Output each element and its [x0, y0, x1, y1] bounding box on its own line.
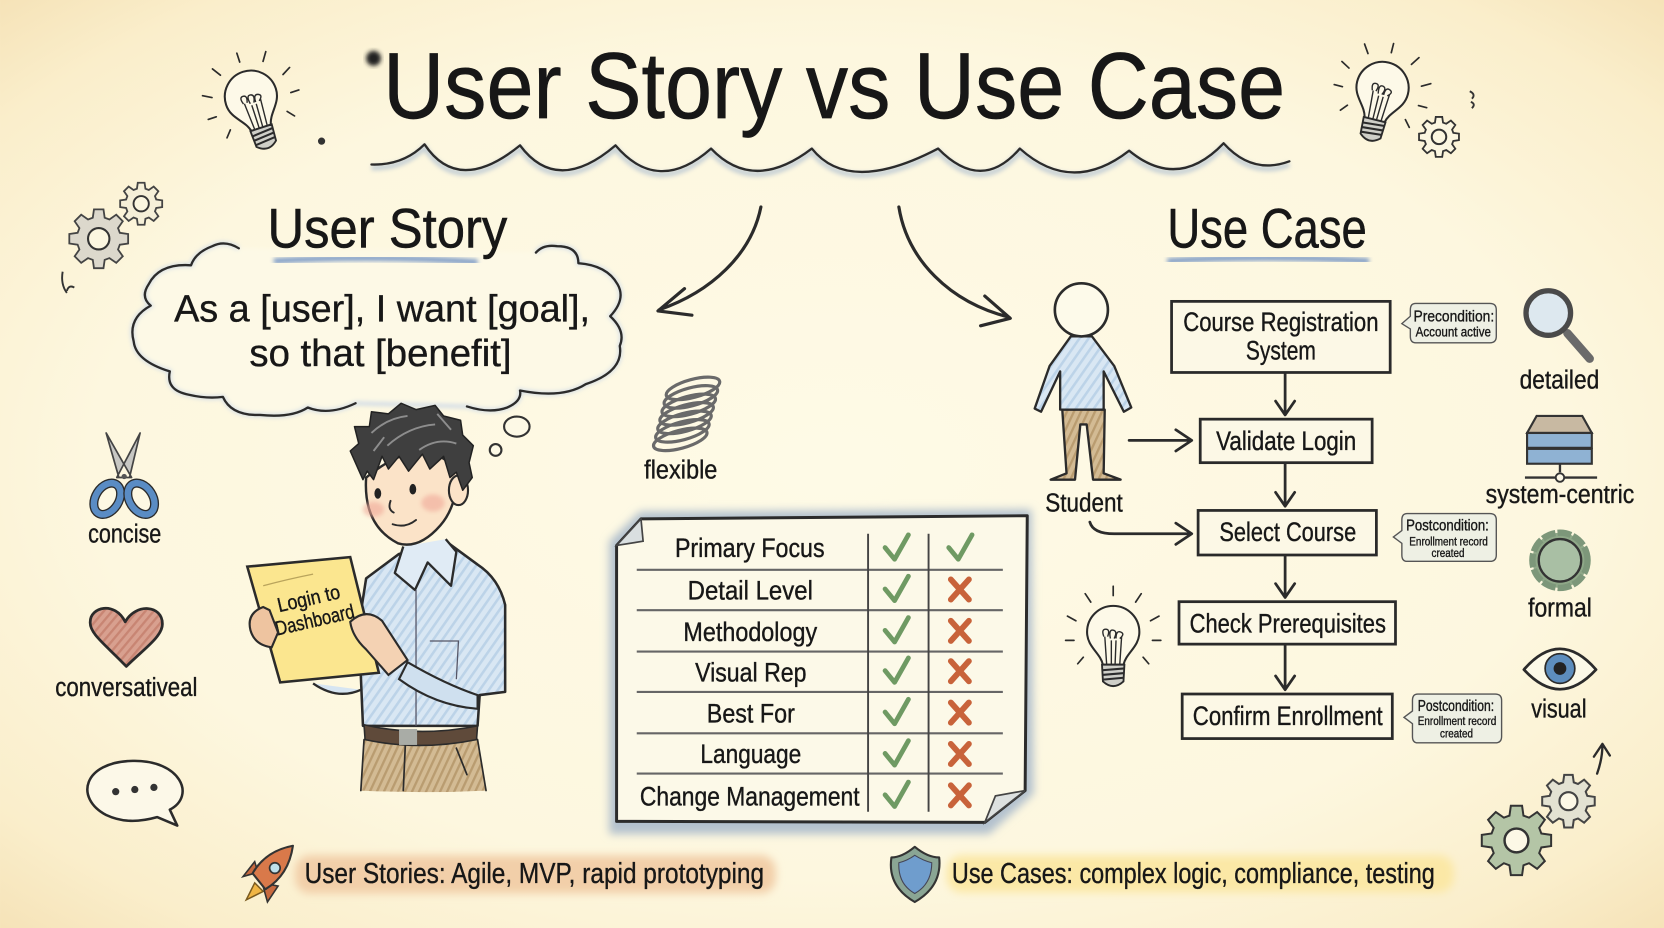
person holding user story card — [247, 403, 505, 792]
banner: use cases: Use Cases: complex logic, compliance, testing — [952, 858, 1435, 890]
callout: postcondition 2: created — [1440, 727, 1473, 741]
cloud text — [174, 288, 590, 375]
yellow story card: Dashboard — [273, 601, 357, 641]
flow step: check prerequisites — [1179, 602, 1395, 644]
row: detail level: Detail Level — [688, 576, 813, 606]
icon: magnifier — [1526, 291, 1590, 359]
flow step: select course — [1198, 510, 1376, 555]
yellow story card — [247, 557, 379, 682]
comparison table sheet — [609, 509, 1034, 834]
icon: spring — [651, 373, 722, 455]
icon: lightbulb top right — [1323, 32, 1440, 152]
callout: postcondition 1 — [1393, 514, 1496, 561]
flow arrow 4 — [1276, 645, 1295, 690]
icon: eye — [1524, 649, 1596, 689]
icon: heart — [90, 608, 162, 666]
row: best for: Best For — [707, 699, 795, 729]
arrow: student to validate login — [1129, 430, 1192, 451]
icon: badge — [1532, 533, 1588, 588]
flow step: course registration system: Course Registration — [1183, 307, 1379, 337]
flow step: select course: Select Course — [1219, 517, 1356, 547]
callout: precondition: Account active — [1416, 324, 1491, 339]
icon: gears bottom right — [1482, 775, 1595, 875]
thought cloud — [132, 243, 622, 416]
arrow: title to user story — [658, 207, 761, 315]
flow step: validate login: Validate Login — [1216, 426, 1356, 456]
row: visual rep — [695, 657, 969, 687]
arrow: title to use case — [899, 207, 1010, 326]
row: language: Language — [700, 739, 801, 769]
actor: student — [1035, 283, 1131, 480]
banner: user stories: User Stories: Agile, MVP, rapid prototyping — [305, 858, 764, 890]
decorative ink marks — [62, 91, 1474, 293]
label: formal: formal — [1528, 595, 1592, 623]
callout: postcondition 2: Enrollment record — [1418, 714, 1496, 728]
belt — [364, 725, 478, 745]
label: flexible: flexible — [644, 457, 717, 485]
title: User Story vs Use Case — [383, 33, 1285, 138]
row: language — [700, 739, 969, 769]
callout: postcondition 2 — [1404, 694, 1502, 743]
flow step: confirm enrollment: Confirm Enrollment — [1193, 701, 1383, 731]
flow step: validate login — [1200, 419, 1372, 463]
row: primary focus: Primary Focus — [675, 533, 825, 563]
icon: speech bubble — [87, 761, 183, 826]
icon: shield — [891, 847, 940, 902]
label: visual: visual — [1531, 695, 1586, 723]
callout: postcondition 1: Enrollment record — [1409, 534, 1488, 548]
flow arrow 2 — [1276, 464, 1295, 506]
callout: precondition — [1402, 303, 1496, 343]
icon: gears top left — [69, 183, 162, 268]
row: best for — [707, 699, 969, 729]
row: methodology — [683, 617, 969, 647]
label: conversativeal: conversativeal — [55, 674, 197, 702]
row: primary focus — [675, 533, 972, 563]
heading: user story: User Story — [267, 197, 508, 259]
label: system-centric: system-centric — [1486, 481, 1634, 509]
callout: postcondition 1: created — [1432, 546, 1464, 560]
flow step: course registration system: System — [1246, 336, 1316, 366]
row: detail level — [688, 576, 969, 606]
flow step: confirm enrollment — [1182, 694, 1392, 739]
icon: server — [1525, 416, 1597, 482]
callout: postcondition 1: Postcondition: — [1406, 518, 1489, 535]
hands — [250, 607, 408, 675]
callout: precondition: Precondition: — [1414, 309, 1494, 326]
icon: lightbulb beside flow — [1066, 586, 1161, 686]
cloud text: As a [user], I want [goal], — [174, 288, 590, 331]
shirt — [313, 539, 505, 726]
trousers — [361, 738, 486, 792]
wavy title underline — [371, 143, 1289, 176]
row: change management: Change Management — [640, 781, 860, 811]
flow arrow 3 — [1276, 556, 1295, 597]
thought bubbles — [490, 417, 530, 456]
cloud text: so that [benefit] — [249, 332, 512, 375]
yellow story card: Login to — [275, 581, 342, 617]
arrow: up — [1594, 744, 1610, 774]
label: student: Student — [1045, 489, 1123, 517]
icon: scissors — [88, 433, 160, 519]
callout: postcondition 2: Postcondition: — [1418, 698, 1494, 715]
head — [350, 403, 473, 545]
heading: use case: Use Case — [1167, 197, 1367, 259]
row: methodology: Methodology — [683, 617, 818, 647]
icon: rocket — [243, 846, 293, 902]
flow step: check prerequisites: Check Prerequisites — [1190, 608, 1386, 638]
flow step: course registration system — [1172, 301, 1390, 372]
label: detailed: detailed — [1520, 366, 1599, 394]
arrow: student to select course — [1090, 522, 1192, 544]
icon: small gear top right — [1419, 117, 1459, 157]
row: visual rep: Visual Rep — [695, 657, 807, 687]
flow arrow 1 — [1276, 374, 1295, 415]
label: concise: concise — [88, 520, 161, 548]
icon: lightbulb top left — [192, 38, 313, 163]
